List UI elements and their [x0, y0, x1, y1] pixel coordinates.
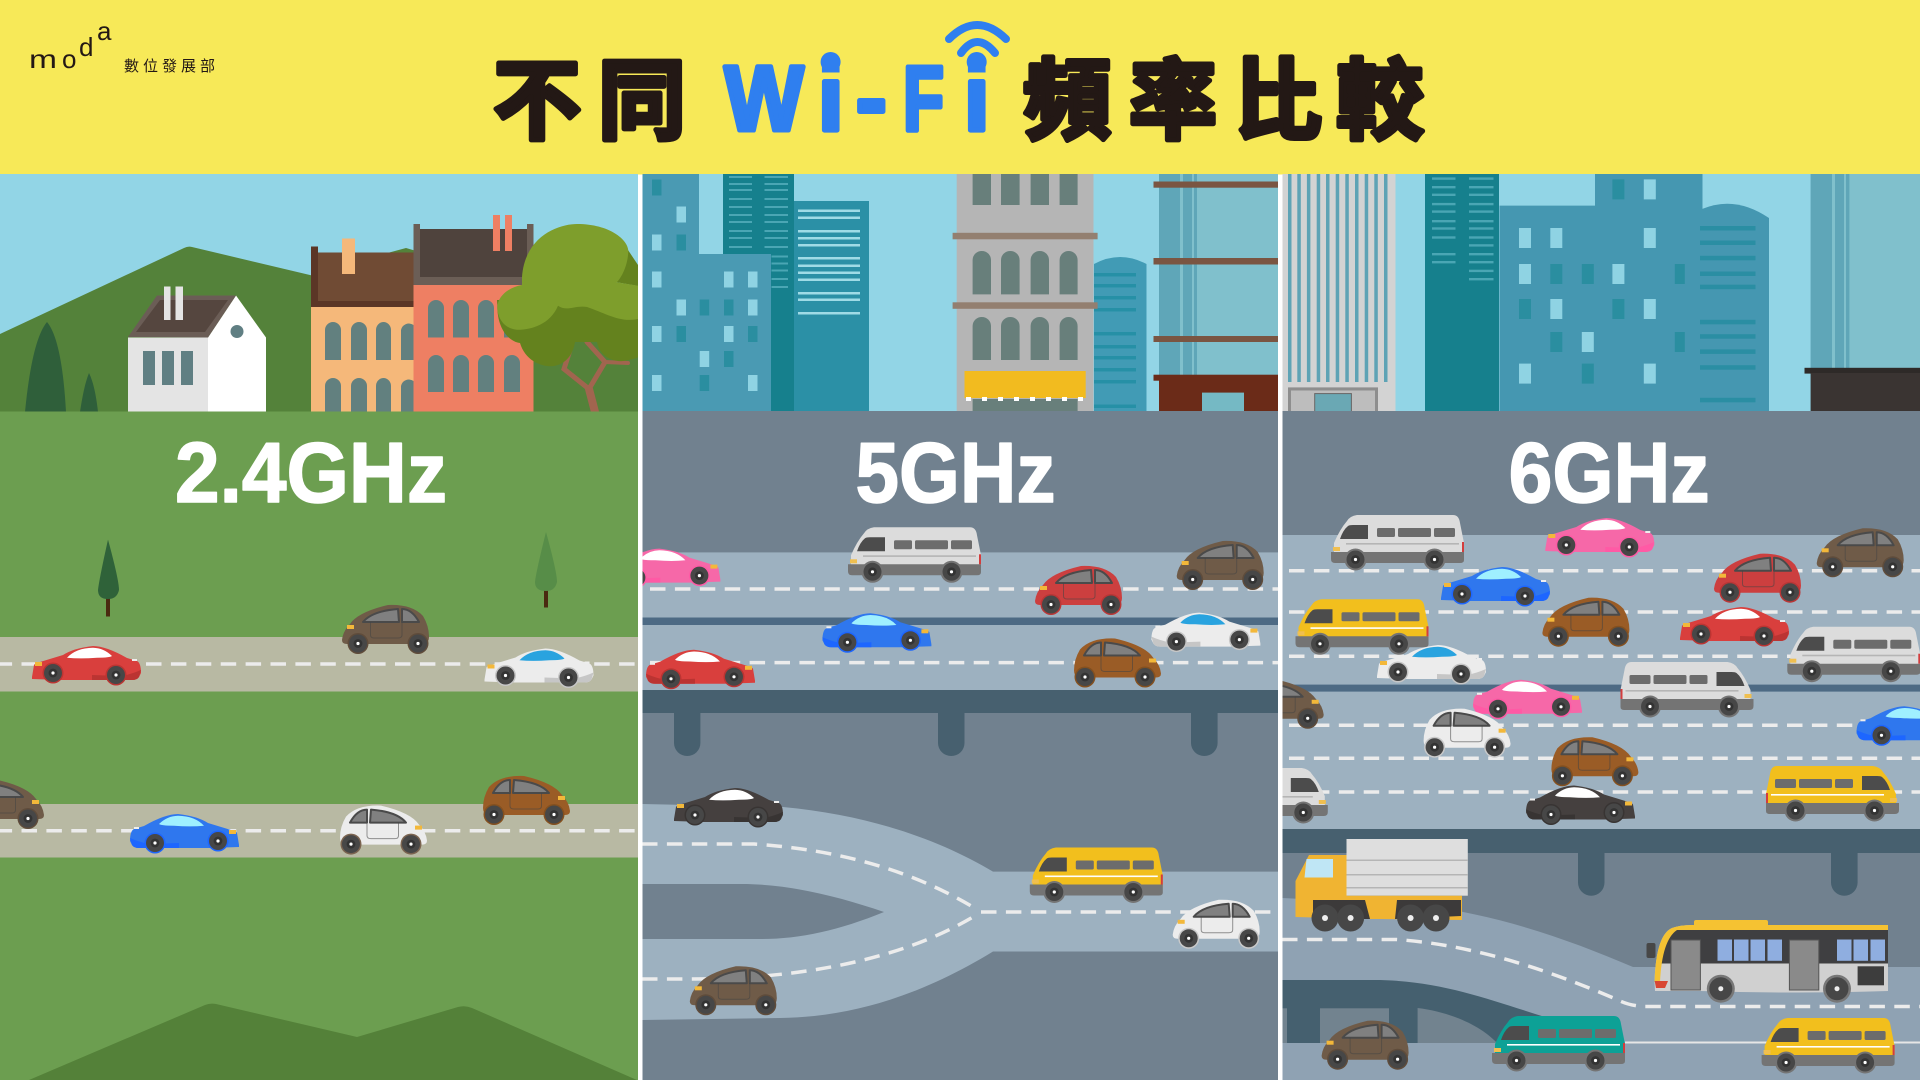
upper multi-lane highway	[1282, 535, 1920, 896]
car: white micro	[340, 806, 427, 855]
car: orange micro	[483, 776, 570, 825]
road 1	[0, 637, 638, 692]
car: brown micro	[690, 966, 777, 1015]
car: red sedan	[646, 650, 755, 689]
panel: 6GHz	[1195, 174, 1920, 1080]
logo: moda: o	[62, 44, 76, 74]
car: pink sedan	[1545, 518, 1654, 558]
car: black sedan	[1526, 786, 1635, 825]
logo: moda: m	[29, 44, 57, 74]
car: blue sedan	[1441, 567, 1550, 606]
glass building	[1154, 174, 1278, 412]
car: pink sedan	[642, 548, 720, 586]
upper highway	[642, 552, 1278, 756]
van: teal	[1492, 1016, 1625, 1072]
car: orange micro	[1551, 737, 1638, 786]
icon: wifi dot and arcs	[949, 25, 1006, 72]
logo: moda	[29, 16, 219, 75]
title: 不同	[493, 52, 686, 151]
title: F	[903, 48, 944, 150]
car: red sedan	[1680, 607, 1789, 646]
van: yellow	[1030, 848, 1163, 903]
van: grey cut	[1195, 768, 1328, 824]
van: grey	[1331, 515, 1464, 570]
car: blue sedan cut	[1856, 706, 1920, 746]
car: brown micro	[1322, 1021, 1409, 1070]
van: yellow	[1296, 599, 1428, 655]
title: i	[964, 48, 990, 150]
van: grey	[1620, 662, 1754, 718]
lower ramp road	[1282, 898, 1920, 1080]
van: yellow	[1762, 1018, 1895, 1074]
car: brown micro cut	[1237, 680, 1324, 729]
orange building	[311, 238, 414, 412]
merging road	[642, 804, 1278, 1020]
car: pink sedan	[1473, 680, 1582, 719]
grey ground	[642, 411, 1278, 1080]
car: brown micro	[1177, 541, 1264, 590]
white house	[128, 286, 266, 412]
car: brown micro	[342, 605, 429, 654]
truck	[1296, 839, 1468, 932]
label: 5GHz: 5GHz	[856, 426, 1056, 521]
glass and dark building	[1804, 174, 1920, 412]
title: i	[818, 48, 844, 150]
title	[493, 25, 1424, 151]
bottom hills	[29, 1004, 637, 1080]
city bus	[1646, 920, 1888, 1003]
label: 6GHz: 6GHz	[1509, 426, 1710, 521]
grey arched building	[953, 174, 1098, 412]
grey ground	[1282, 411, 1920, 1080]
hill background	[0, 247, 638, 412]
ground	[0, 412, 638, 1080]
logo: moda: a	[97, 16, 112, 46]
car: white micro	[1424, 709, 1511, 758]
tree	[497, 224, 638, 412]
rounded tower	[1700, 204, 1769, 412]
car: white sedan	[1151, 613, 1260, 652]
car: brown micro cut	[0, 780, 44, 829]
red building	[414, 215, 534, 412]
car: orange micro	[1074, 638, 1161, 688]
logo: moda: d	[79, 32, 93, 62]
car: black sedan	[674, 788, 783, 828]
car: brown micro	[1817, 528, 1904, 577]
rounded teal tower	[1094, 257, 1146, 412]
tree: dark	[98, 540, 119, 616]
car: red micro	[1714, 554, 1801, 603]
city: teal buildings	[642, 174, 869, 412]
title: W	[724, 48, 804, 150]
label: 2.4GHz: 2.4GHz	[175, 426, 447, 521]
title: -	[856, 48, 887, 150]
car: white sedan	[1377, 645, 1486, 684]
car: white sedan	[484, 648, 594, 688]
car: white micro	[1173, 900, 1260, 949]
car: blue sedan	[822, 613, 931, 653]
panel: 5GHz	[611, 174, 1278, 1080]
logo: moda: 數位發展部	[124, 58, 219, 75]
tree: light	[535, 532, 557, 608]
van: grey	[848, 527, 981, 583]
van: yellow	[1766, 766, 1899, 822]
car: blue sedan	[130, 814, 239, 854]
car: orange micro	[1542, 598, 1629, 647]
dark teal tower	[1425, 174, 1499, 412]
header band	[0, 0, 1920, 174]
road 2	[0, 804, 638, 858]
van: grey	[1787, 627, 1920, 682]
panel: 2.4GHz	[0, 174, 638, 1080]
car: red micro	[1035, 566, 1122, 615]
title: 頻率比較	[1023, 52, 1424, 151]
car: red sedan	[32, 646, 141, 686]
blue office block	[1500, 174, 1702, 412]
overpass below ramp	[1282, 980, 1545, 1043]
striped office tower	[1282, 174, 1396, 412]
